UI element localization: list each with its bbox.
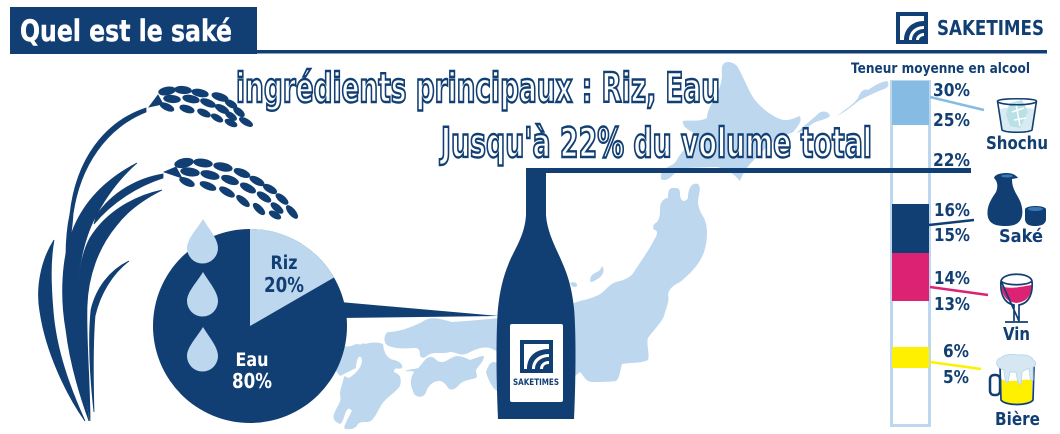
icon: sake flask and cup xyxy=(987,173,1046,226)
alcohol scale bar xyxy=(890,81,931,426)
percentage scale labels xyxy=(933,80,970,388)
pie chart: Riz 20%, Eau 80%: 20% xyxy=(264,273,304,297)
percentage scale labels: 25% xyxy=(933,110,970,131)
percentage scale labels: 14% xyxy=(934,268,970,289)
connector: shochu xyxy=(930,97,984,110)
label: Vin: Vin xyxy=(1003,325,1030,345)
leaves and stems xyxy=(39,95,182,421)
sake bottle xyxy=(496,168,576,419)
bottle label logo: SAKETIMES xyxy=(513,378,559,388)
pie chart: Riz 20%, Eau 80% xyxy=(153,229,347,423)
icon: water drops xyxy=(187,219,218,372)
alcohol scale title: Teneur moyenne en alcool xyxy=(851,61,1030,77)
percentage scale labels: 16% xyxy=(934,200,970,221)
percentage scale labels: 13% xyxy=(934,294,970,315)
heading: ingredients: ingrédients principaux : Riz, Eau xyxy=(236,64,720,112)
pie chart: Riz 20%, Eau 80%: Riz xyxy=(270,253,298,274)
percentage scale labels: 6% xyxy=(943,341,969,362)
header bar and title: Quel est le saké xyxy=(20,14,232,48)
label: Shochu: Shochu xyxy=(986,134,1048,154)
connector: beer xyxy=(930,362,981,369)
pie chart: Riz 20%, Eau 80%: 80% xyxy=(232,369,272,393)
percentage scale labels: 15% xyxy=(934,225,970,246)
connector: wine xyxy=(930,287,988,295)
rice plant xyxy=(39,86,299,421)
icon: beer mug xyxy=(990,354,1036,404)
upper rice head xyxy=(159,86,253,128)
label: Saké: Saké xyxy=(999,227,1043,247)
line from bottle level to 22% xyxy=(546,168,971,173)
percentage scale labels: 22% xyxy=(933,150,970,171)
percentage scale labels: 5% xyxy=(943,367,969,388)
icon: shochu glass xyxy=(998,99,1036,132)
percentage scale labels: 30% xyxy=(933,80,970,101)
pie chart: Riz 20%, Eau 80%: Eau xyxy=(236,350,268,371)
SAKETIMES logo xyxy=(896,12,1044,44)
map of Japan xyxy=(332,62,888,429)
icon: wine glass xyxy=(1001,274,1032,322)
pointer from pie to bottle xyxy=(340,302,499,318)
connector: sake xyxy=(929,220,974,225)
lower rice head xyxy=(174,157,299,220)
label: Bière: Bière xyxy=(995,410,1040,430)
header bar and title xyxy=(10,7,1047,54)
bottle label logo xyxy=(513,340,559,388)
